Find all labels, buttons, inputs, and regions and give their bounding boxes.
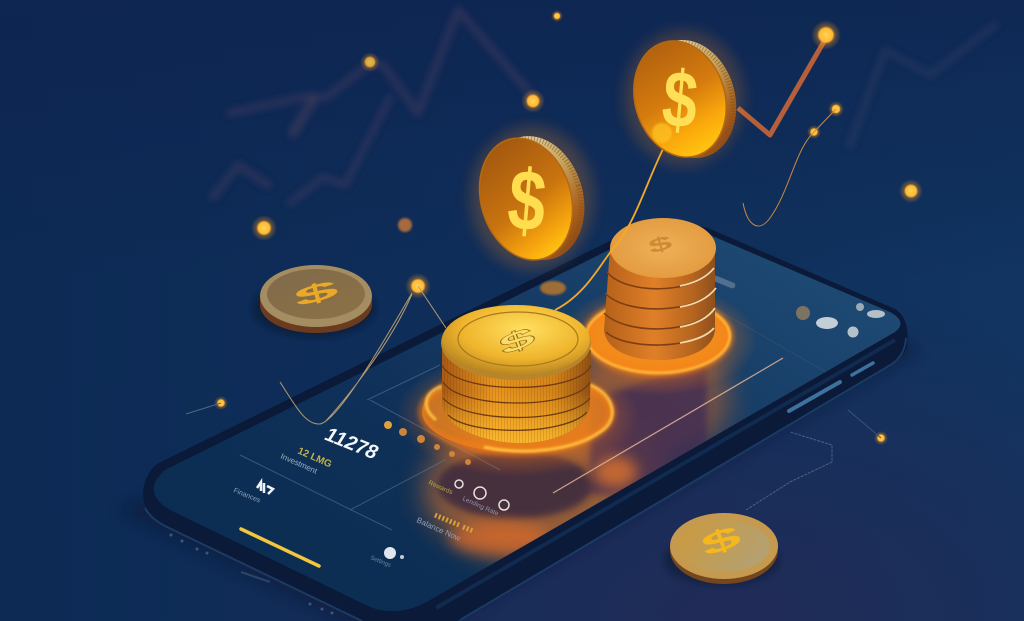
glow <box>395 353 639 477</box>
screen text and icons: Lending Rate <box>461 495 500 518</box>
thin lines around front stack <box>280 286 446 424</box>
dollar sign: $ <box>504 152 550 250</box>
stack top <box>610 218 716 278</box>
screen text and icons <box>232 275 885 569</box>
background faded line chart <box>213 10 995 203</box>
balance sublabels: 12 LMG <box>296 446 333 471</box>
top right status icons <box>816 317 838 329</box>
phone <box>120 224 920 621</box>
orange icon row <box>384 421 471 465</box>
chart line upper right <box>738 38 826 135</box>
flat coin left: $ <box>291 273 341 313</box>
dollar sign: $ <box>659 54 701 146</box>
stack side <box>604 248 715 360</box>
screen text and icons: Investment <box>279 452 319 476</box>
screen text and icons: Finances <box>232 487 262 505</box>
back coin stack <box>558 218 758 396</box>
phone shadow <box>120 260 920 621</box>
speaker dots <box>170 534 334 614</box>
front coin stack: $ <box>495 321 539 361</box>
balance value: 11278 <box>320 424 383 464</box>
small action icons <box>455 480 509 510</box>
left icon and label <box>257 482 273 494</box>
floating coin right <box>620 29 750 169</box>
phone screen <box>154 230 900 611</box>
balance bars label: Balance Now <box>415 516 462 543</box>
screen text and icons: Rewards <box>427 479 454 497</box>
flat coin left <box>252 265 376 338</box>
front coin stack <box>395 305 639 477</box>
phone body <box>143 224 908 621</box>
back coin stack: $ <box>646 230 674 258</box>
screen grid lines <box>240 300 840 530</box>
stack side <box>442 350 591 443</box>
glowing dots <box>214 10 923 445</box>
floating coin left <box>466 124 599 272</box>
screen glow <box>240 300 840 562</box>
flat coin bottom right: $ <box>696 518 745 563</box>
flat coin bottom right <box>664 513 780 586</box>
rising line to top coin <box>555 145 665 310</box>
glow ring <box>558 284 758 396</box>
screen text and icons: Settings <box>369 555 392 569</box>
yellow bar <box>241 529 319 566</box>
bottom right nav icon <box>384 547 396 559</box>
thin connector lines <box>186 109 881 510</box>
stack top <box>441 306 591 380</box>
phone side buttons <box>789 382 840 411</box>
